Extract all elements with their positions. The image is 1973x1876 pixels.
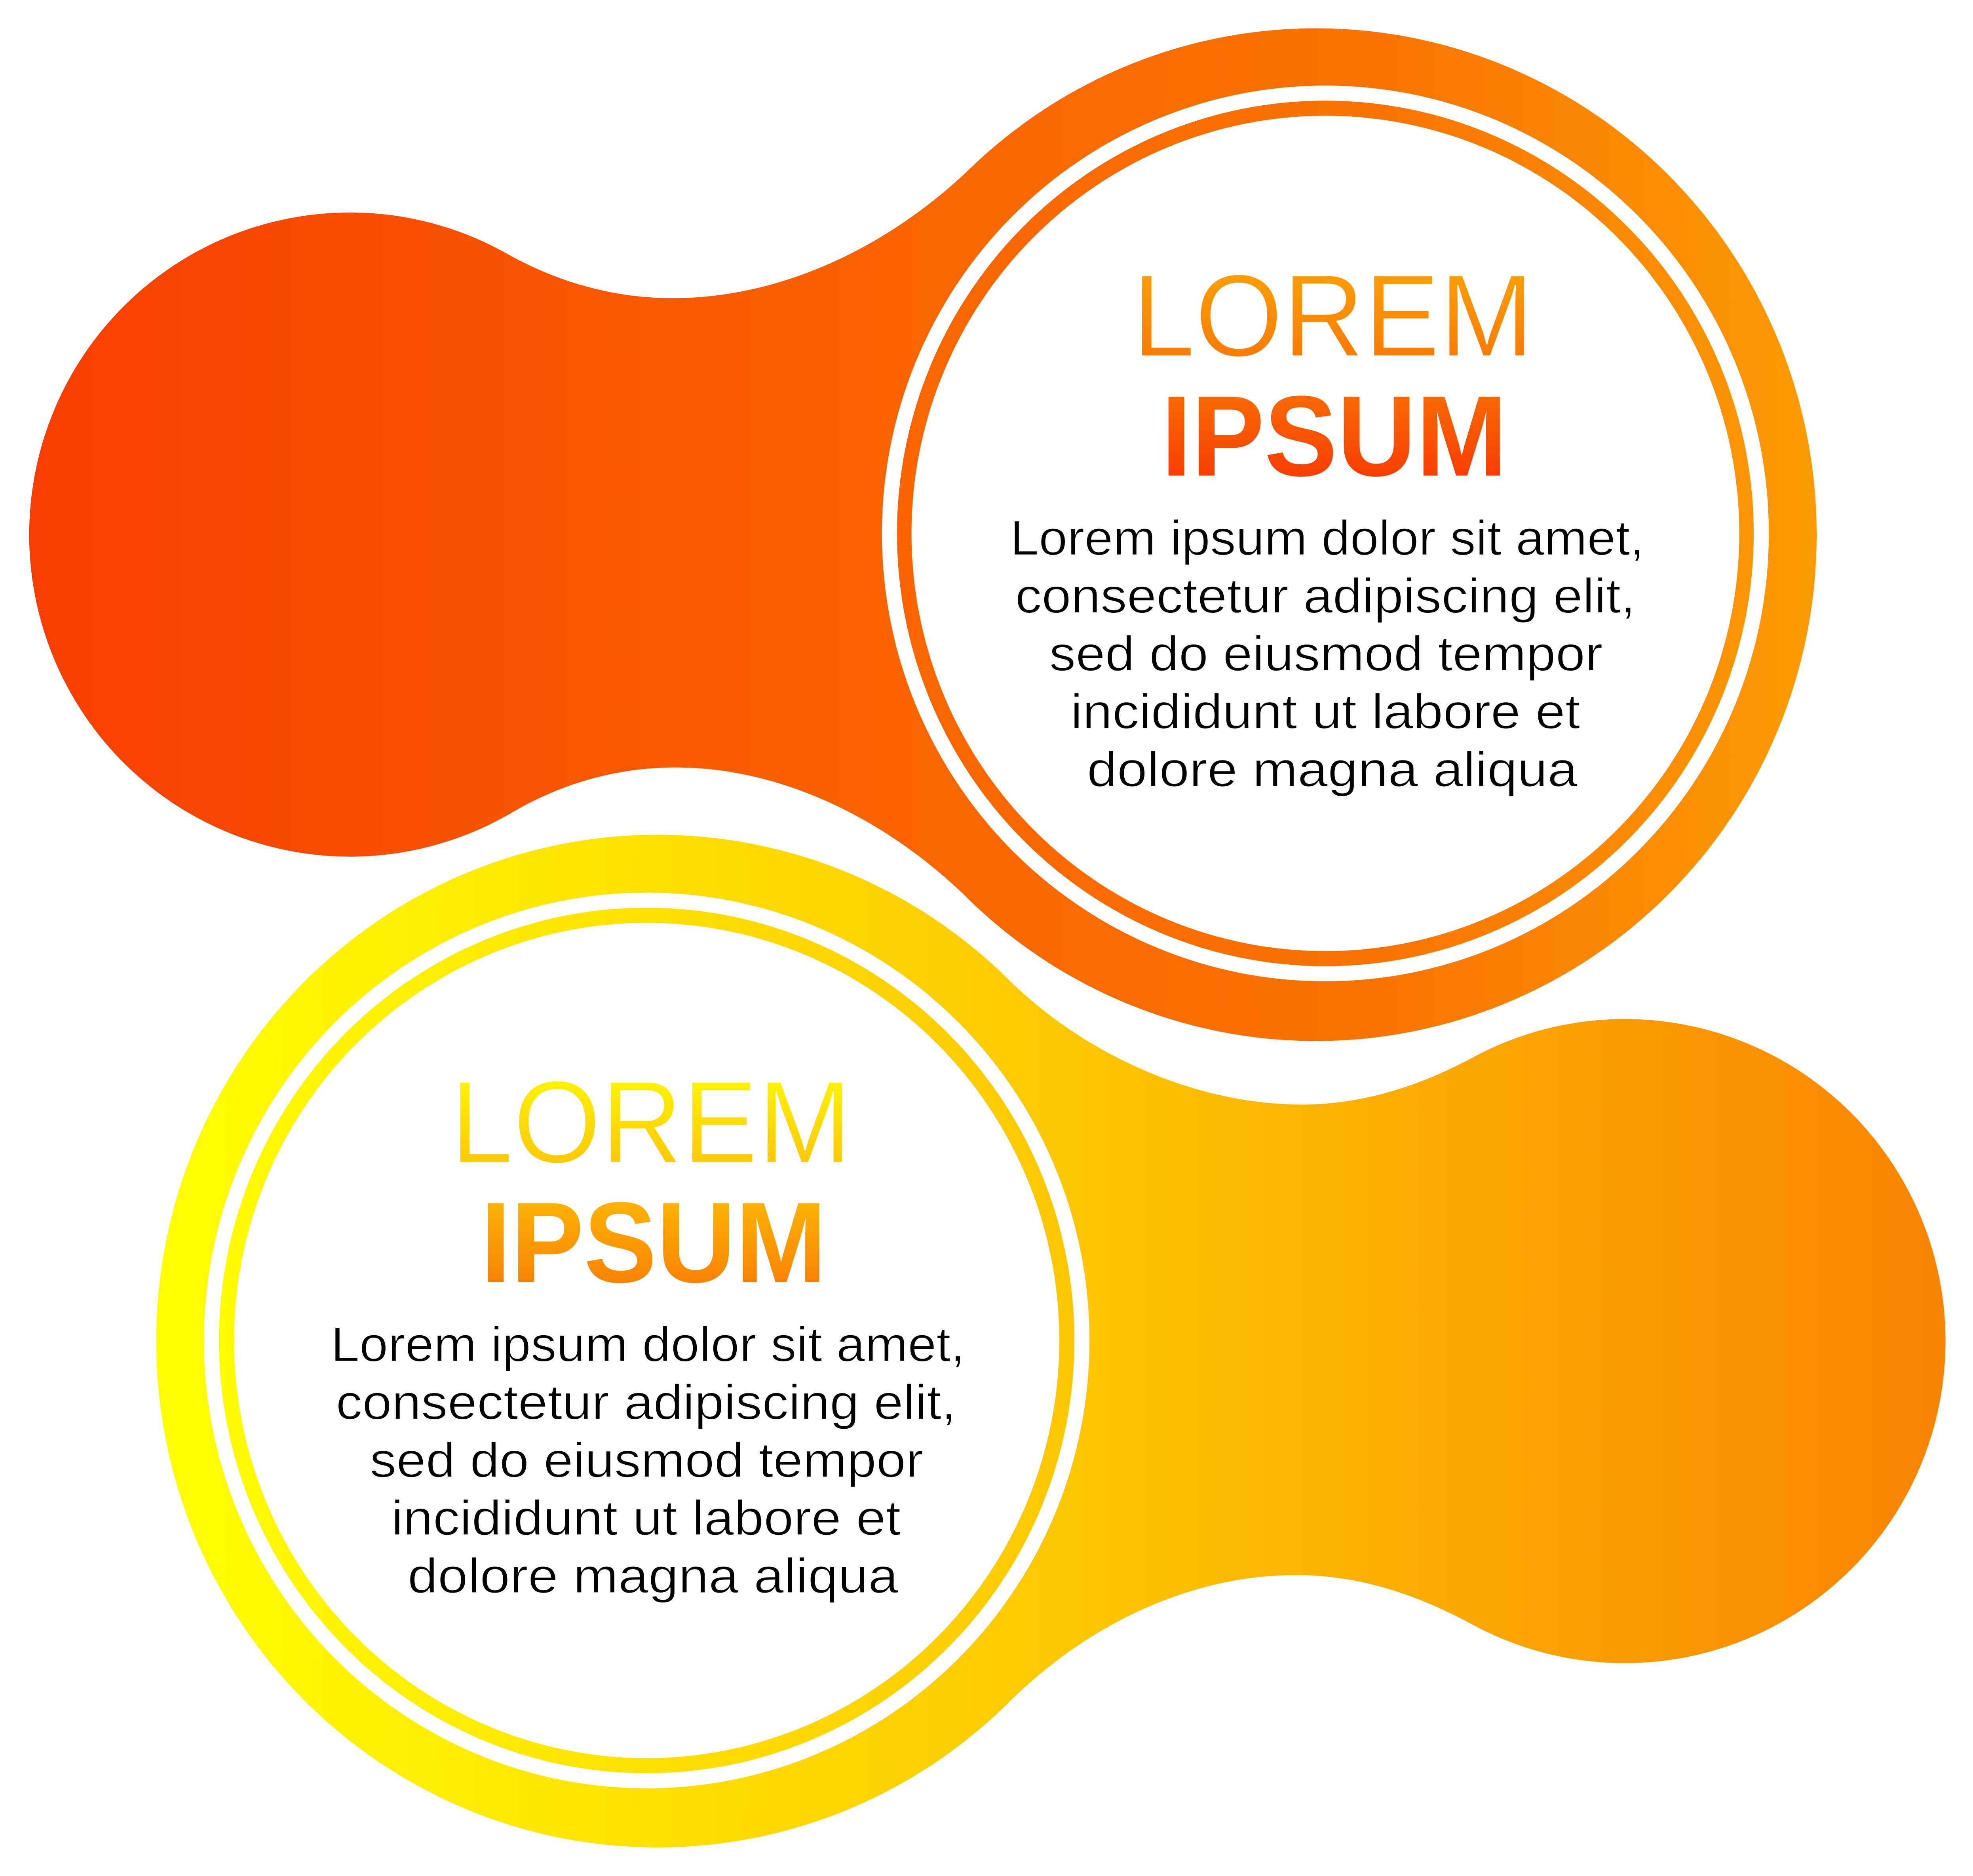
text block: top: dolore magna aliqua — [1087, 742, 1578, 797]
heading: bottom: IPSUM — [481, 1178, 827, 1306]
text block: bottom — [331, 1317, 965, 1603]
text block: bottom: incididunt ut labore et — [391, 1491, 901, 1545]
text block: bottom: Lorem ipsum dolor sit amet, — [331, 1317, 965, 1372]
circle frame: top — [882, 86, 1769, 981]
heading: bottom — [450, 1056, 852, 1306]
connector shape: bottom — [156, 835, 1946, 1847]
circle frame: bottom — [204, 893, 1089, 1788]
panel: bottom yellow connector — [156, 835, 1946, 1847]
text block: top: sed do eiusmod tempor — [1049, 627, 1603, 681]
heading: top — [1132, 250, 1534, 500]
text block: bottom: dolore magna aliqua — [408, 1549, 898, 1603]
connector shape: top — [29, 28, 1817, 1041]
text block: top: incididunt ut labore et — [1070, 684, 1580, 739]
panel: top orange connector — [29, 28, 1817, 1041]
text block: top — [1010, 511, 1644, 797]
text block: top: Lorem ipsum dolor sit amet, — [1010, 511, 1644, 565]
heading: top: LOREM — [1132, 250, 1534, 381]
text block: top: consectetur adipiscing elit, — [1015, 569, 1635, 623]
heading: bottom: LOREM — [450, 1056, 852, 1187]
text block: bottom: consectetur adipiscing elit, — [336, 1375, 956, 1430]
heading: top: IPSUM — [1161, 372, 1507, 500]
text block: bottom: sed do eiusmod tempor — [370, 1433, 924, 1488]
